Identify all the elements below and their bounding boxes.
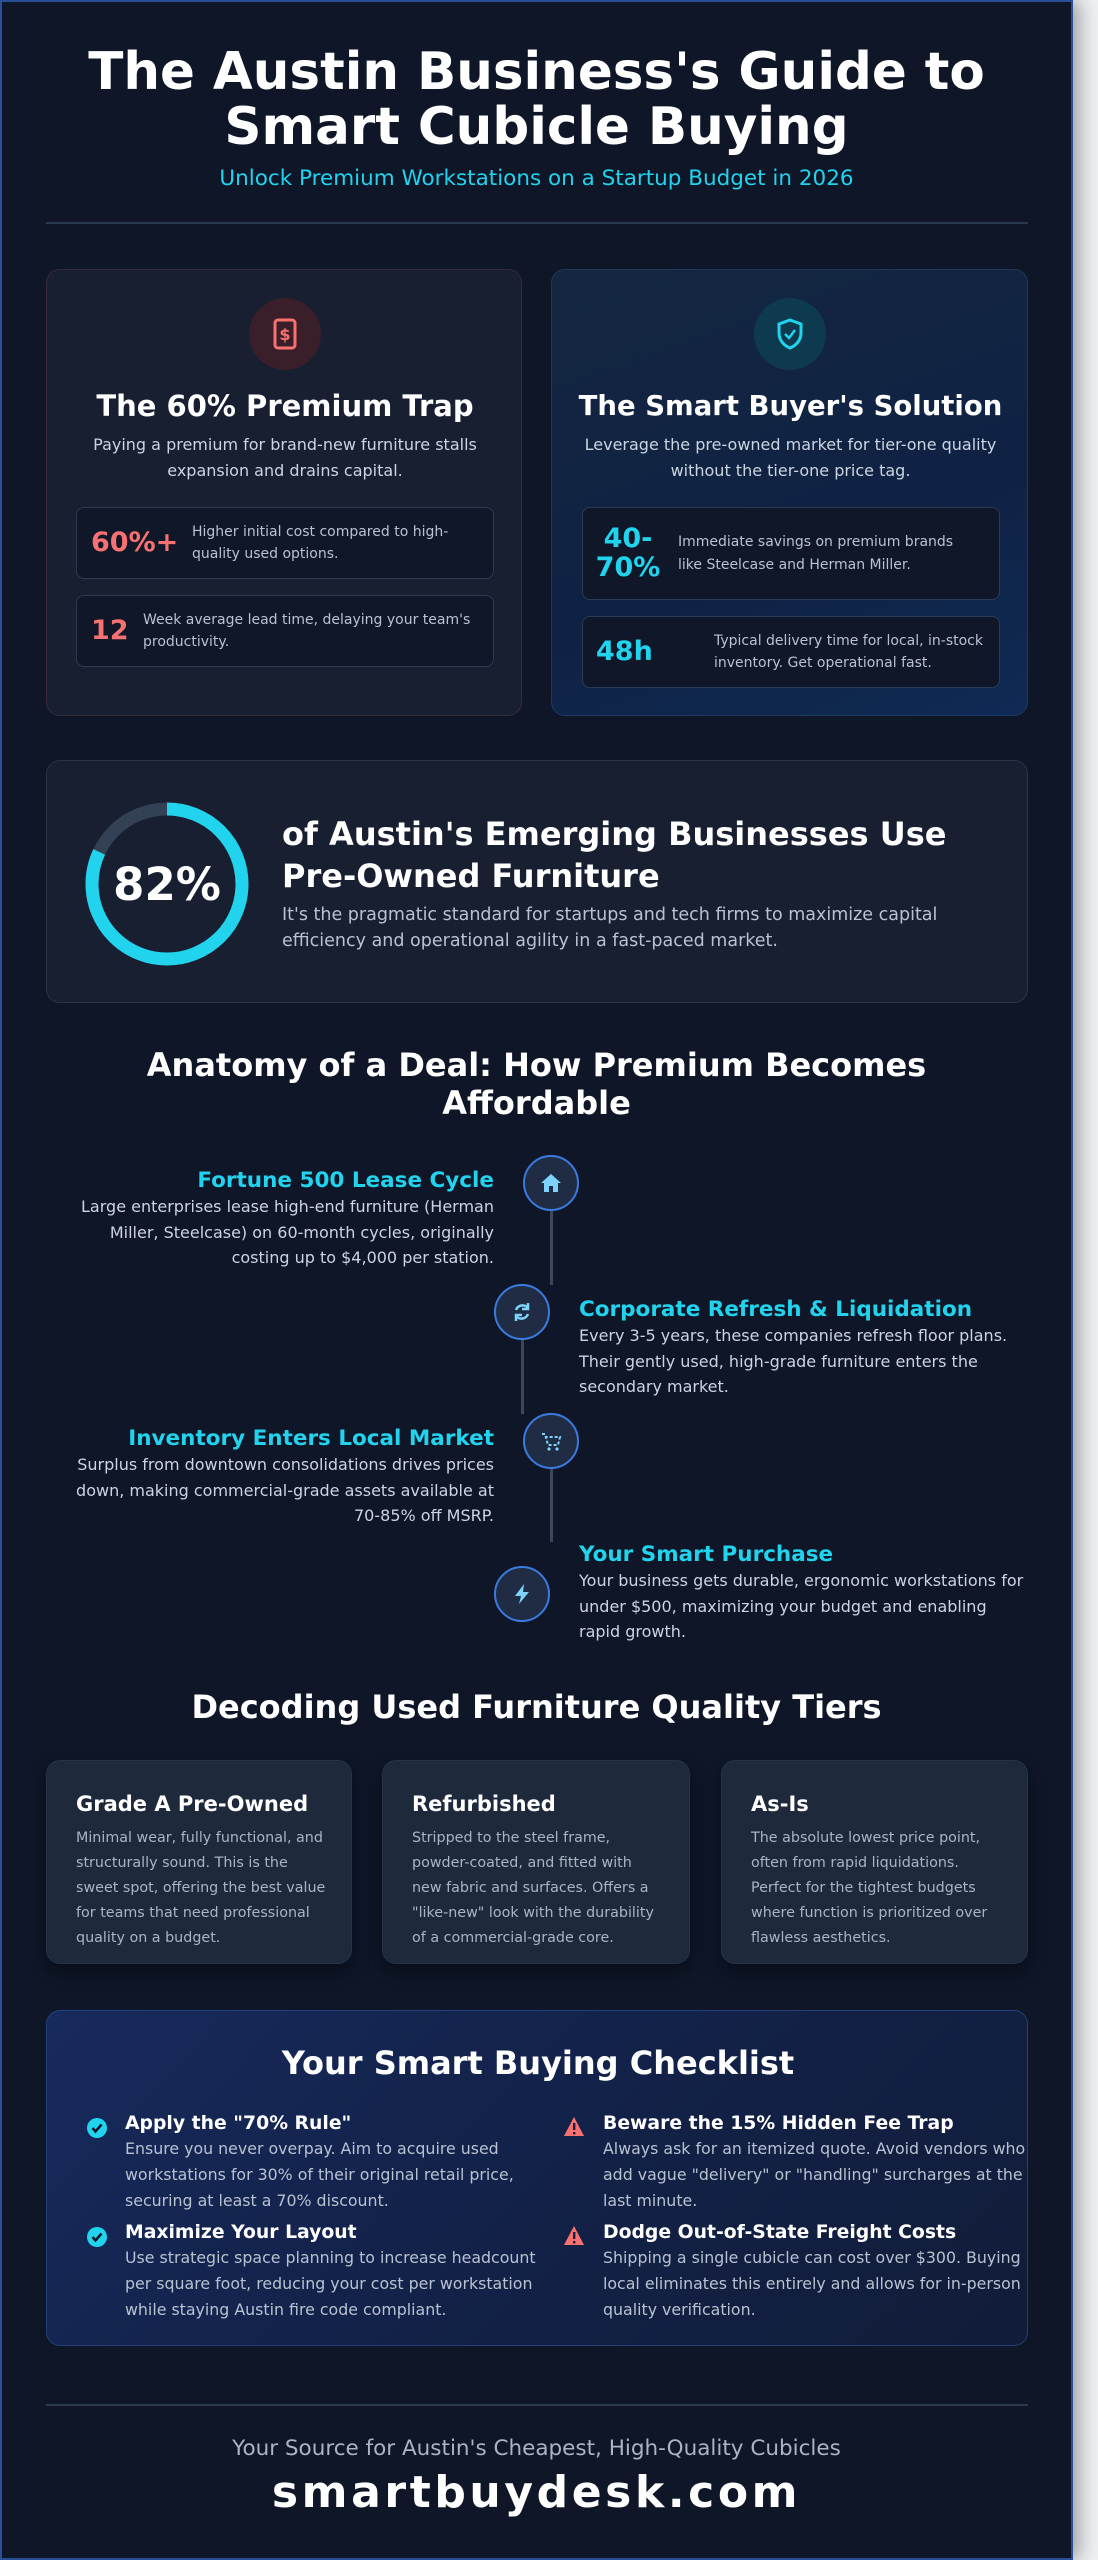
heading: quality tiers: Decoding Used Furniture Quality Tiers bbox=[191, 1688, 882, 1726]
panel: checklist: add vague "delivery" or "handling" surcharges at the bbox=[603, 2165, 1023, 2184]
panel: checklist: while staying Austin fire code compliant. bbox=[125, 2300, 446, 2319]
panel: checklist: Always ask for an itemized quote. Avoid vendors who bbox=[603, 2139, 1025, 2158]
panel: checklist: Apply the "70% Rule" bbox=[125, 2113, 351, 2134]
icon: step 2 refresh bbox=[494, 1284, 550, 1340]
stat: 12: Week average lead time, delaying your team's bbox=[143, 612, 470, 628]
title bbox=[88, 42, 985, 157]
step 4 text: Your business gets durable, ergonomic workstations for bbox=[579, 1571, 1023, 1590]
tier: refurbished: Refurbished bbox=[412, 1792, 556, 1816]
step 4 text: rapid growth. bbox=[579, 1622, 686, 1641]
title: The Austin Business's Guide to bbox=[88, 42, 985, 102]
item: layout bbox=[87, 2222, 536, 2319]
panel: checklist: quality verification. bbox=[603, 2300, 756, 2319]
stat: 48h bbox=[582, 616, 1000, 688]
timeline bbox=[76, 1155, 1024, 1641]
panel: checklist: Beware the 15% Hidden Fee Trap bbox=[603, 2113, 954, 2134]
tier: as-is: The absolute lowest price point, bbox=[751, 1830, 980, 1846]
heading: anatomy: Anatomy of a Deal: How Premium Becomes bbox=[147, 1046, 926, 1084]
stat: 48h: inventory. Get operational fast. bbox=[714, 655, 932, 671]
icon: step 1 home bbox=[523, 1155, 579, 1211]
tier: refurbished: powder-coated, and fitted with bbox=[412, 1855, 632, 1871]
stat: 60%+ bbox=[76, 507, 494, 579]
footer domain: smartbuydesk.com bbox=[272, 2467, 801, 2518]
title: Smart Cubicle Buying bbox=[224, 97, 849, 157]
step 2 text: Every 3-5 years, these companies refresh floor plans. bbox=[579, 1326, 1007, 1345]
tier: grade A: for teams that need professional bbox=[76, 1905, 310, 1921]
tier: refurbished: new fabric and surfaces. Offers a bbox=[412, 1880, 649, 1896]
step 3 text: 70-85% off MSRP. bbox=[354, 1506, 494, 1525]
tier: as-is bbox=[721, 1760, 1028, 1964]
icon: shield bbox=[754, 298, 826, 370]
tier: refurbished: Stripped to the steel frame, bbox=[412, 1830, 610, 1846]
description bbox=[93, 435, 477, 480]
item: 70% rule bbox=[87, 2113, 514, 2210]
stat: 48h: 48h bbox=[596, 636, 653, 667]
stat: 40-70%: Immediate savings on premium brands bbox=[678, 534, 953, 550]
step 1 text: Fortune 500 Lease Cycle bbox=[197, 1168, 494, 1193]
tier: grade A: Grade A Pre-Owned bbox=[76, 1792, 308, 1816]
heading: Pre-Owned Furniture bbox=[282, 857, 660, 895]
tier: as-is: flawless aesthetics. bbox=[751, 1930, 891, 1946]
stat: 40-70% bbox=[582, 507, 1000, 600]
stat: 12: productivity. bbox=[143, 634, 229, 650]
heading: of Austin's Emerging Businesses Use bbox=[282, 815, 946, 853]
description: expansion and drains capital. bbox=[167, 461, 403, 480]
heading bbox=[282, 815, 946, 895]
panel: checklist: Use strategic space planning to increase headcount bbox=[125, 2248, 536, 2267]
tier: refurbished: "like-new" look with the durability bbox=[412, 1905, 654, 1921]
heading: Your Smart Buying Checklist bbox=[282, 2044, 794, 2082]
stat: 12: 12 bbox=[91, 615, 129, 646]
step 4 text: Your Smart Purchase bbox=[579, 1542, 833, 1567]
step 2 text: Their gently used, high-grade furniture enters the bbox=[579, 1352, 978, 1370]
step 2 text: secondary market. bbox=[579, 1377, 729, 1396]
heading: The Smart Buyer's Solution bbox=[579, 390, 1002, 422]
step 1 text: Large enterprises lease high-end furniture (Herman bbox=[81, 1197, 494, 1216]
step 1 text: costing up to $4,000 per station. bbox=[232, 1248, 494, 1267]
description bbox=[282, 905, 937, 951]
panel: checklist: local eliminates this entirely and allows for in-person bbox=[603, 2274, 1021, 2293]
panel: checklist: securing at least a 70% discount. bbox=[125, 2191, 389, 2210]
panel: premium trap bbox=[46, 269, 522, 716]
step 4 text: under $500, maximizing your budget and enabling bbox=[579, 1596, 987, 1616]
panel: checklist: Shipping a single cubicle can cost over $300. Buying bbox=[603, 2248, 1021, 2267]
subtitle: Unlock Premium Workstations on a Startup Budget in 2026 bbox=[219, 166, 854, 191]
step 2 text: Corporate Refresh & Liquidation bbox=[579, 1297, 972, 1322]
step 1 text bbox=[81, 1168, 494, 1267]
step 3 text: Surplus from downtown consolidations drives prices bbox=[77, 1455, 494, 1474]
panel: checklist: workstations for 30% of their original retail price, bbox=[125, 2165, 514, 2184]
stat: 12 bbox=[76, 595, 494, 667]
step 2 text bbox=[578, 1297, 1007, 1396]
tier: refurbished bbox=[382, 1760, 690, 1964]
panel: checklist: Maximize Your Layout bbox=[125, 2222, 357, 2243]
step 3 text: Inventory Enters Local Market bbox=[128, 1426, 494, 1451]
icon: wallet bbox=[249, 298, 321, 370]
item: hidden fee bbox=[564, 2113, 1025, 2210]
item: freight bbox=[564, 2222, 1021, 2319]
panel: checklist: per square foot, reducing your cost per workstation bbox=[125, 2274, 532, 2293]
heading: anatomy: Affordable bbox=[442, 1084, 631, 1122]
description: efficiency and operational agility in a fast-paced market. bbox=[282, 931, 778, 951]
stat: 60%+: 60%+ bbox=[91, 527, 178, 558]
tier: refurbished: of a commercial-grade core. bbox=[412, 1930, 614, 1946]
tier: grade A: Minimal wear, fully functional, and bbox=[76, 1830, 323, 1846]
panel: 82% stat bbox=[46, 760, 1028, 1003]
panel: smart solution bbox=[551, 269, 1028, 716]
panel: checklist: Dodge Out-of-State Freight Costs bbox=[603, 2222, 956, 2243]
stat: 40-70%: 40- bbox=[604, 523, 652, 554]
step 3 text bbox=[76, 1426, 494, 1525]
stat: 40-70%: 70% bbox=[596, 552, 660, 583]
description: without the tier-one price tag. bbox=[671, 461, 910, 480]
step 3 text: down, making commercial-grade assets available at bbox=[76, 1480, 494, 1500]
panel: checklist bbox=[46, 2010, 1028, 2346]
tier: as-is: As-Is bbox=[751, 1792, 809, 1816]
tier: grade A: quality on a budget. bbox=[76, 1930, 220, 1946]
heading: The 60% Premium Trap bbox=[96, 389, 474, 423]
tier: as-is: often from rapid liquidations. bbox=[751, 1855, 959, 1871]
chart: ring 82% bbox=[86, 802, 248, 966]
icon: step 3 cart bbox=[523, 1413, 579, 1469]
description: It's the pragmatic standard for startups and tech firms to maximize capital bbox=[282, 905, 937, 925]
stat: 40-70%: like Steelcase and Herman Miller. bbox=[678, 557, 911, 573]
panel: checklist: Ensure you never overpay. Aim to acquire used bbox=[125, 2139, 499, 2158]
tier: grade A bbox=[46, 1760, 352, 1964]
tier: grade A: sweet spot, offering the best value bbox=[76, 1880, 325, 1896]
tier: as-is: Perfect for the tightest budgets bbox=[751, 1880, 976, 1896]
icon: wallet: $ bbox=[279, 325, 291, 344]
heading: anatomy bbox=[146, 1046, 926, 1122]
stat: 60%+: Higher initial cost compared to high- bbox=[192, 524, 448, 540]
tier: grade A: structurally sound. This is the bbox=[76, 1855, 288, 1871]
chart: ring 82%: 82% bbox=[113, 858, 221, 911]
stat: 48h: Typical delivery time for local, in-stock bbox=[714, 633, 983, 649]
tier: as-is: where function is prioritized over bbox=[751, 1905, 987, 1921]
panel: checklist: last minute. bbox=[603, 2191, 697, 2210]
description bbox=[585, 435, 996, 480]
footer tagline: Your Source for Austin's Cheapest, High-Quality Cubicles bbox=[232, 2436, 841, 2461]
description: Paying a premium for brand-new furniture stalls bbox=[93, 435, 477, 454]
description: Leverage the pre-owned market for tier-one quality bbox=[585, 435, 996, 454]
icon: step 4 bolt bbox=[494, 1566, 550, 1622]
stat: 60%+: quality used options. bbox=[192, 546, 338, 562]
step 1 text: Miller, Steelcase) on 60-month cycles, originally bbox=[110, 1222, 494, 1242]
step 4 text bbox=[578, 1542, 1024, 1641]
